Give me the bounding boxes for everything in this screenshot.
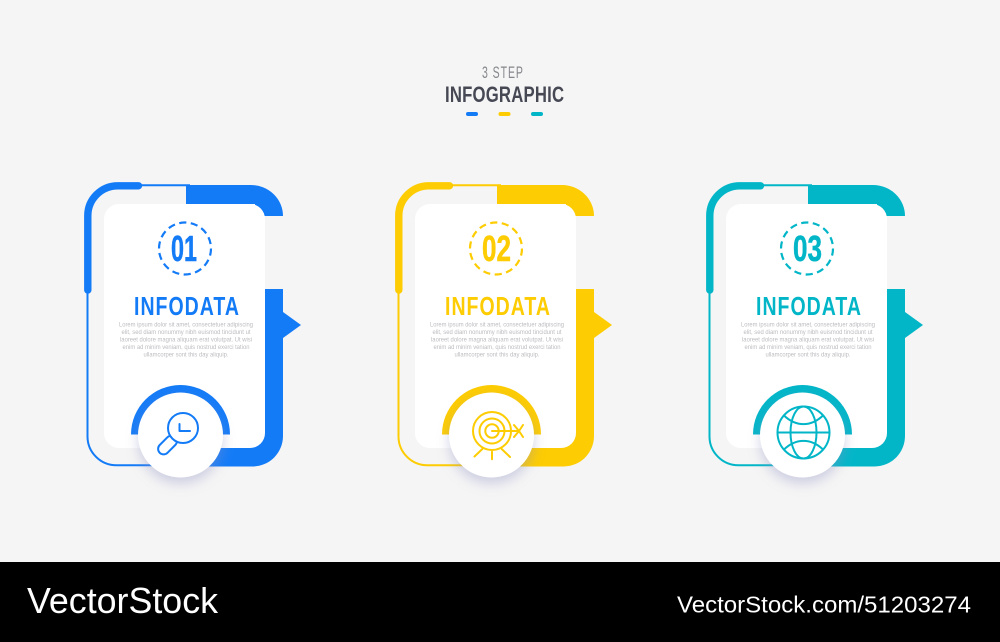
thick top left stroke (710, 186, 760, 290)
number badge: 01 (171, 228, 197, 269)
white card (104, 204, 265, 448)
body text (430, 322, 565, 358)
panel heading: INFODATA (756, 291, 861, 321)
panel heading: INFODATA (445, 291, 550, 321)
body text: Lorem ipsum dolor sit amet, consectetuer adipiscing (430, 322, 565, 328)
thin outline (87, 185, 200, 465)
body text: Lorem ipsum dolor sit amet, consectetuer adipiscing (119, 322, 254, 328)
body text: elit, sed diam nonummy nibh euismod tincidunt ut (122, 329, 251, 336)
white card (415, 204, 576, 448)
number badge: 03 (793, 228, 822, 269)
body text (741, 322, 876, 358)
body text (119, 322, 254, 358)
thick top left stroke (399, 186, 450, 290)
thin outline (709, 185, 822, 465)
thin outline (398, 185, 511, 465)
thick top left stroke (88, 186, 138, 290)
icon arc (442, 385, 541, 434)
body text: ullamcorper sont this day aliquip. (454, 352, 540, 358)
icon: target with arrow (473, 412, 523, 459)
title (445, 62, 564, 116)
body text: laoreet dolore magna aliquam erat volutpat. Ut wisi (742, 336, 874, 344)
frame top right block (808, 185, 905, 216)
body text: enim ad minim veniam, quis nostrud exerci tation (122, 344, 250, 351)
heading: infographic: INFOGRAPHIC (445, 83, 564, 108)
footer brand: VectorStock (27, 580, 219, 621)
body text: ullamcorper sont this day aliquip. (144, 352, 229, 358)
icon disc (760, 392, 845, 478)
body text: elit, sed diam nonummy nibh euismod tincidunt ut (432, 329, 562, 336)
subtitle: 3 step: 3 STEP (482, 62, 523, 82)
body text: ullamcorper sont this day aliquip. (766, 352, 851, 358)
body text: enim ad minim veniam, quis nostrud exerci tation (434, 344, 561, 351)
arrow pointer (905, 312, 923, 338)
icon disc (138, 392, 223, 478)
body text: elit, sed diam nonummy nibh euismod tincidunt ut (744, 329, 873, 336)
frame right and bottom bar (822, 289, 905, 466)
arrow pointer (594, 312, 612, 338)
icon arc (131, 385, 230, 434)
footer url: VectorStock.com/51203274 (677, 592, 971, 618)
icon: globe (778, 406, 830, 458)
frame top right block (186, 185, 283, 216)
frame right and bottom bar (511, 289, 594, 466)
panel: step 1 (87, 185, 301, 478)
icon: magnifier with clock (156, 413, 198, 457)
body text: enim ad minim veniam, quis nostrud exerci tation (744, 344, 872, 351)
frame right and bottom bar (200, 289, 283, 466)
panel heading: INFODATA (134, 291, 239, 321)
body text: laoreet dolore magna aliquam erat volutpat. Ut wisi (431, 336, 563, 344)
icon disc (449, 392, 534, 478)
white card (726, 204, 887, 448)
number badge: 02 (482, 228, 511, 269)
icon arc (753, 385, 852, 434)
colour dashes (466, 112, 543, 116)
body text: laoreet dolore magna aliquam erat volutpat. Ut wisi (120, 336, 252, 344)
number badge (470, 222, 522, 274)
panel: step 3 (709, 185, 923, 478)
arrow pointer (283, 312, 301, 338)
number badge (159, 222, 211, 274)
frame top right block (497, 185, 594, 216)
body text: Lorem ipsum dolor sit amet, consectetuer adipiscing (741, 322, 876, 328)
footer bar (0, 562, 1000, 642)
panel: step 2 (398, 185, 612, 478)
number badge (781, 222, 833, 274)
